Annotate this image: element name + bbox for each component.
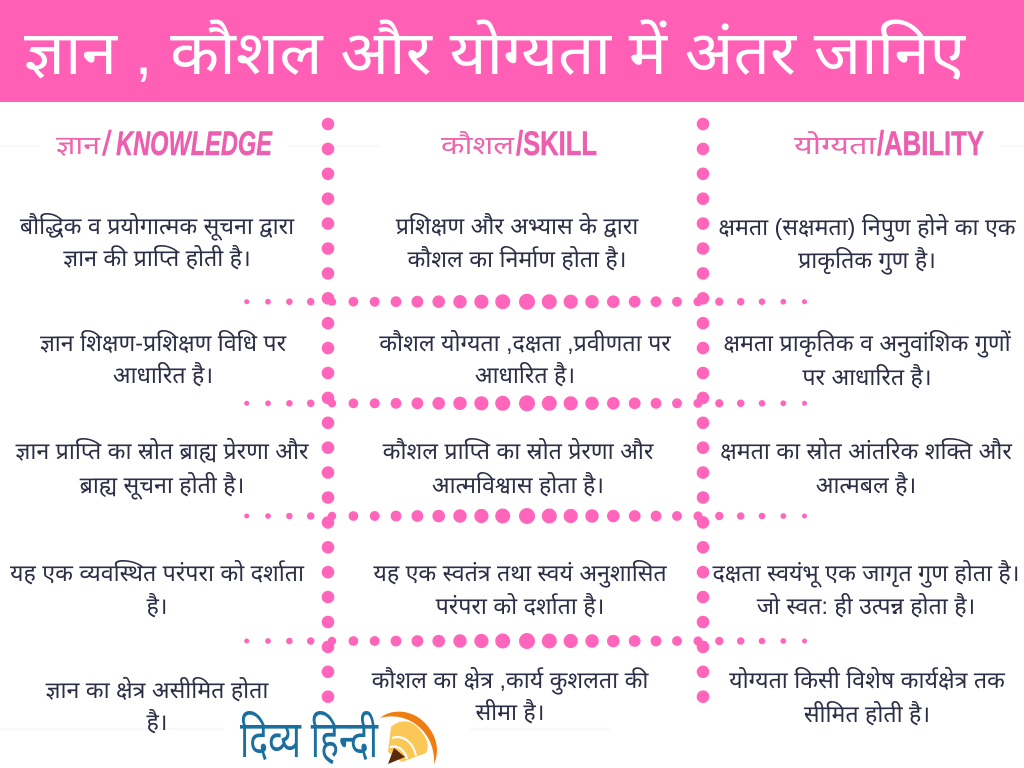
heading: knowledge: / KNOWLEDGE: [102, 125, 273, 163]
ability row 1: क्षमता (सक्षमता) निपुण होने का एक: [718, 213, 1017, 242]
ability row 1: प्राकृतिक गुण है।: [798, 246, 936, 275]
knowledge row 2: आधारित है।: [113, 361, 213, 388]
knowledge row 3: ब्राह्य सूचना होती है।: [80, 471, 244, 500]
skill row 5: कौशल का क्षेत्र ,कार्य कुशलता की: [372, 666, 649, 695]
icon: pencil: [380, 712, 437, 764]
skill row 3: [383, 437, 654, 498]
skill row 1: प्रशिक्षण और अभ्यास के द्वारा: [396, 212, 639, 239]
skill row 4: यह एक स्वतंत्र तथा स्वयं अनुशासित: [373, 559, 667, 588]
ability row 2: [723, 329, 1012, 390]
ability row 5: सीमित होती है।: [804, 700, 930, 727]
ability row 3: [720, 437, 1012, 498]
heading: skill: कौशल: [441, 130, 514, 160]
horizontal dotted divider 3: [244, 508, 807, 524]
skill row 3: आत्मविश्वास होता है।: [432, 471, 604, 498]
horizontal dotted divider 4: [244, 633, 807, 649]
horizontal dotted divider 2: [244, 395, 807, 411]
ability row 2: पर आधारित है।: [802, 363, 932, 390]
horizontal dotted divider 1: [244, 294, 807, 310]
ability row 4: दक्षता स्वयंभू एक जागृत गुण होता है।: [712, 559, 1020, 588]
ability row 3: क्षमता का स्रोत आंतरिक शक्ति और: [720, 437, 1012, 464]
knowledge row 4: यह एक व्यवस्थित परंपरा को दर्शाता: [10, 559, 305, 586]
heading: ability: [794, 125, 984, 163]
knowledge row 5: ज्ञान का क्षेत्र असीमित होता: [46, 676, 269, 703]
knowledge row 1: ज्ञान की प्राप्ति होती है।: [63, 244, 251, 271]
knowledge row 4: [10, 559, 305, 619]
skill row 2: कौशल योग्यता ,दक्षता ,प्रवीणता पर: [379, 329, 671, 356]
heading: ability: योग्यता: [794, 130, 878, 160]
ability row 4: जो स्वत: ही उत्पन्न होता है।: [757, 592, 975, 619]
ability row 2: क्षमता प्राकृतिक व अनुवांशिक गुणों: [723, 329, 1012, 358]
skill row 5: सीमा है।: [475, 698, 545, 725]
skill row 5: [372, 666, 649, 725]
knowledge row 5: [46, 676, 269, 735]
skill row 4: [373, 559, 667, 619]
skill row 2: [379, 329, 671, 388]
title banner: [0, 0, 1024, 102]
heading: knowledge: [56, 125, 273, 163]
skill row 1: कौशल का निर्माण होता है।: [407, 245, 627, 272]
title banner: ज्ञान , कौशल और योग्यता में अंतर जानिए: [24, 19, 966, 87]
knowledge row 1: बौद्धिक व प्रयोगात्मक सूचना द्वारा: [20, 212, 295, 241]
ability row 4: [712, 559, 1020, 619]
knowledge row 5: है।: [146, 708, 168, 735]
knowledge row 3: [15, 437, 309, 500]
knowledge row 4: है।: [146, 592, 168, 619]
vertical dotted divider right: [697, 118, 709, 703]
heading: ability: /ABILITY: [877, 125, 984, 163]
skill row 1: [396, 212, 639, 272]
heading: knowledge: ज्ञान: [56, 130, 101, 160]
skill row 3: कौशल प्राप्ति का स्रोत प्रेरणा और: [383, 437, 654, 464]
knowledge row 2: [40, 329, 287, 388]
ability row 1: [718, 213, 1017, 275]
knowledge row 2: ज्ञान शिक्षण-प्रशिक्षण विधि पर: [40, 329, 287, 356]
knowledge row 3: ज्ञान प्राप्ति का स्रोत ब्राह्य प्रेरणा और: [15, 437, 309, 464]
ability row 3: आत्मबल है।: [816, 471, 916, 498]
skill row 4: परंपरा को दर्शाता है।: [436, 592, 604, 619]
heading: skill: [441, 125, 597, 163]
ability row 5: [729, 666, 1006, 727]
logo: divya hindi: दिव्य हिन्दी: [240, 711, 379, 768]
knowledge row 1: [20, 212, 295, 271]
vertical dotted divider left: [322, 118, 334, 703]
heading: skill: /SKILL: [516, 125, 597, 163]
skill row 2: आधारित है।: [475, 361, 575, 388]
ability row 5: योग्यता किसी विशेष कार्यक्षेत्र तक: [729, 666, 1006, 693]
